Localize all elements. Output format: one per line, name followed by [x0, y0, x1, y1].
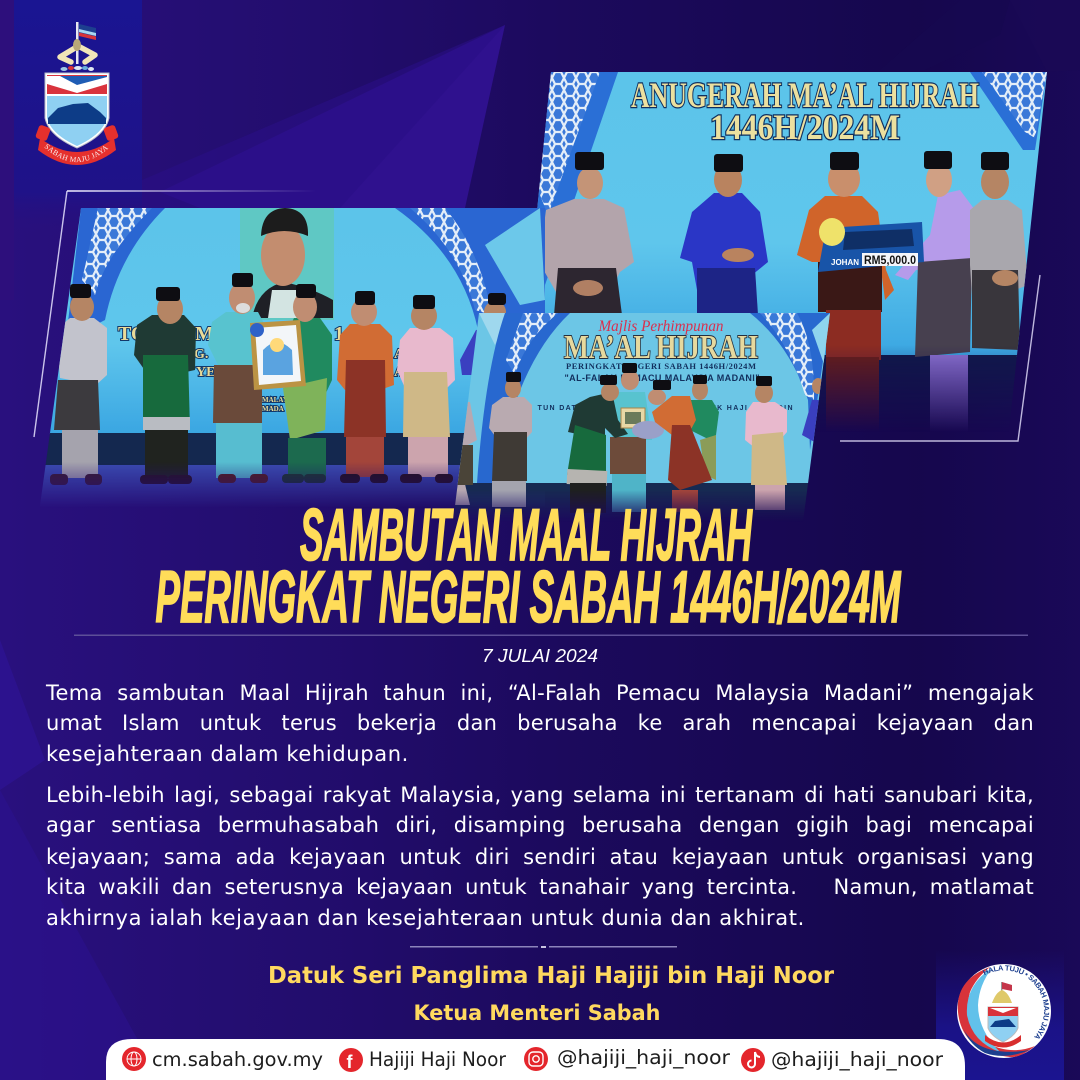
screen text: MALAY: [262, 396, 288, 404]
screen title text: "AL-FALAH PEMACU MALAYSIA MADANI": [564, 373, 760, 383]
icon: facebook: f: [346, 1052, 354, 1072]
text: umat Islam untuk terus bekerja dan berusaha ke arah mencapai kejayaan dan: [46, 711, 1034, 735]
photo: left, tokoh award: [38, 208, 548, 521]
cheque: JOHAN: [831, 258, 859, 267]
logo: Hala Tuju badge: [957, 964, 1051, 1058]
screen text: A: [394, 365, 405, 380]
framed award certificate: [250, 320, 306, 390]
person: cyan baju: [609, 363, 652, 512]
signatory: Ketua Menteri Sabah: [414, 1001, 660, 1026]
person: orange baju: [797, 152, 894, 437]
shield: [45, 73, 109, 148]
facebook name: Hajiji Haji Noor: [369, 1048, 507, 1071]
screen title text: MA’AL HIJRAH: [564, 329, 758, 366]
screen text: MADA: [262, 405, 284, 413]
rule under title: [74, 634, 1028, 636]
person: grey baju: [539, 152, 634, 315]
screen text: G.: [194, 347, 208, 362]
gift frame and flowers: [621, 408, 664, 439]
screen title text: Majlis Perhimpunan: [598, 318, 724, 335]
arms: [60, 47, 95, 62]
person: pink baju: [745, 376, 787, 510]
portrait on stage screen: [240, 208, 334, 320]
scroll: [35, 124, 51, 142]
person: turquoise baju: [208, 273, 270, 483]
stage title text: 1446H/2024M: [710, 107, 900, 147]
signatory: Datuk Seri Panglima Haji Hajiji bin Haji Noor: [268, 963, 835, 989]
photo: right, Anugerah Ma'al Hijrah: [537, 72, 1047, 426]
screen text: A: [394, 347, 405, 362]
icon: instagram: [524, 1047, 548, 1071]
signatory: [268, 963, 835, 1026]
paragraph one: [46, 681, 1034, 766]
flag: [76, 22, 96, 64]
frame lines: [34, 191, 1040, 441]
screen title text: PERINGKAT NEGERI SABAH 1446H/2024M: [566, 361, 756, 371]
text: Lebih-lebih lagi, sebagai rakyat Malaysia, yang selama ini tertanam di hati sanubari kita,: [46, 783, 1034, 807]
person: dark green baju bowing: [567, 375, 628, 513]
person: orange baju bowing: [648, 380, 712, 512]
screen text: [118, 323, 405, 413]
person: orange baju: [337, 291, 394, 483]
icon: facebook: [339, 1048, 363, 1072]
tiktok handle: @hajiji_haji_noor: [771, 1048, 944, 1071]
website: cm.sabah.gov.my: [152, 1048, 323, 1071]
signature divider: [410, 946, 677, 948]
screen text: MA: [195, 323, 229, 345]
screen text: TO: [118, 323, 147, 345]
title: [156, 495, 902, 638]
person: green baju behind: [690, 375, 719, 480]
paragraph two: [46, 783, 1034, 930]
text: agar sentiasa bermuhasabah diri, disamping berusaha dengan gigih bagi mencapai: [46, 813, 1034, 837]
person: pink baju: [397, 295, 455, 483]
icon: web: [122, 1047, 146, 1071]
stage title text: [630, 82, 980, 141]
screen text: 1: [334, 323, 344, 345]
person: lilac baju: [895, 151, 975, 440]
person: grey, far left partial: [455, 402, 477, 505]
person: blue baju right partial: [802, 378, 822, 442]
person: grey baju: [489, 372, 532, 507]
person: blue baju: [680, 154, 768, 315]
beads: [60, 66, 94, 71]
footer contact bar: [106, 1039, 965, 1080]
instagram handle: @hajiji_haji_noor: [557, 1046, 731, 1069]
person: partly hidden blue baju: [460, 293, 510, 375]
screen title text: TUN DATUK TUK HAJI DIN: [538, 405, 792, 412]
person: grey baju right: [970, 152, 1028, 350]
photo: centre, Majlis Perhimpunan: [450, 313, 835, 530]
fist on pole: [73, 39, 81, 51]
logo: Hala Tuju badge: HALA TUJU • SABAH MAJU JAYA: [982, 965, 1050, 1039]
text: kesejahteraan dalam kehidupan.: [46, 742, 409, 766]
crest: Sabah coat of arms: SABAH MAJU JAYA: [44, 144, 108, 162]
cheque: [818, 218, 924, 272]
crest: Sabah coat of arms: [36, 22, 118, 165]
cheque: RM5,000.0: [864, 253, 916, 267]
text: kejayaan; sama ada kejayaan untuk diri sendiri atau kejayaan untuk organisasi yang: [46, 845, 1034, 869]
screen text: YE: [196, 365, 215, 380]
screen title text: [538, 318, 792, 412]
person: grey baju left: [50, 284, 107, 485]
person: dark green baju: [134, 287, 196, 484]
text: Tema sambutan Maal Hijrah tahun ini, “Al-Falah Pemacu Malaysia Madani” mengajak: [46, 681, 1034, 705]
person: green baju receiving award: [282, 284, 332, 483]
icon: tiktok: [741, 1048, 765, 1072]
stage floor: [41, 433, 464, 502]
text: kita wakili dan seterusnya kejayaan untuk tanahair yang tercinta. Namun, matlamat: [46, 875, 1034, 899]
text: akhirnya ialah kejayaan dan kesejahteraan untuk dunia dan akhirat.: [46, 906, 805, 930]
stage floor: [454, 483, 808, 514]
date: 7 JULAI 2024: [482, 646, 598, 666]
